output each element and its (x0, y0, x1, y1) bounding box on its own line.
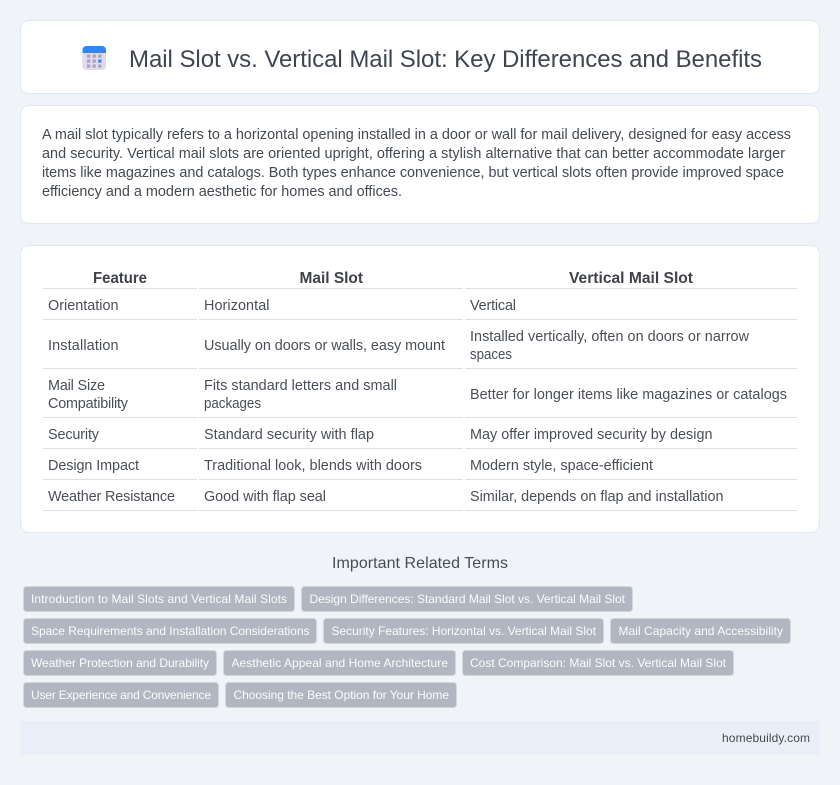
chip (24, 586, 294, 612)
chip (610, 618, 790, 644)
row: orientation: Orientation (48, 298, 118, 314)
chip: Introduction to Mail Slots and Vertical Mail Slots (31, 592, 287, 606)
row: installation: spaces (470, 347, 512, 363)
panel: comparison table (20, 246, 820, 532)
chip: Weather Protection and Durability (31, 656, 209, 670)
row: orientation (43, 298, 797, 320)
row: orientation: Vertical (470, 298, 516, 314)
related term chips (24, 586, 790, 708)
chip (302, 586, 632, 612)
row: installation: Usually on doors or walls, easy mount (204, 338, 445, 354)
row: mail size compatibility: Mail Size (48, 378, 105, 394)
row: security: Standard security with flap (204, 427, 374, 443)
chip (462, 650, 734, 676)
panel: header (20, 20, 820, 94)
text block: description: A mail slot typically refers to a horizontal opening installed in a door or wall for mail delivery, designed for easy access (42, 127, 791, 143)
footer: homebuildy.com (722, 731, 810, 745)
table header: Feature (93, 270, 147, 287)
row: mail size compatibility: packages (204, 396, 261, 412)
row: security: May offer improved security by design (470, 427, 712, 443)
row: security (43, 427, 797, 449)
table header: Mail Slot (300, 270, 364, 287)
chip (24, 618, 316, 644)
chip (24, 650, 216, 676)
chip: Space Requirements and Installation Considerations (31, 624, 310, 638)
row: orientation: Horizontal (204, 298, 270, 314)
chip (24, 682, 218, 708)
row: design impact: Modern style, space-efficient (470, 458, 653, 474)
chip: Choosing the Best Option for Your Home (234, 688, 449, 702)
table header: Vertical Mail Slot (569, 270, 694, 287)
chip: Mail Capacity and Accessibility (618, 624, 783, 638)
chip: Security Features: Horizontal vs. Vertical Mail Slot (332, 624, 597, 638)
text block: description: items like magazines and catalogs. Both types enhance convenience, but vertical slots often provide improved space (42, 165, 784, 181)
row: design impact (43, 458, 797, 480)
chip (224, 650, 456, 676)
row: weather resistance: Similar, depends on flap and installation (470, 489, 724, 505)
row: installation: Installed vertically, often on doors or narrow (470, 329, 750, 345)
row: design impact: Traditional look, blends with doors (204, 458, 422, 474)
row: weather resistance: Weather Resistance (48, 489, 175, 505)
icon: calendar (82, 46, 106, 70)
chip: User Experience and Convenience (31, 688, 211, 702)
row: mail size compatibility: Better for longer items like magazines or catalogs (470, 387, 787, 403)
row: weather resistance (43, 489, 797, 511)
text block: description (42, 127, 791, 200)
footer (20, 721, 820, 755)
row: weather resistance: Good with flap seal (204, 489, 326, 505)
chip (226, 682, 456, 708)
panel: description (20, 106, 820, 224)
chip: Cost Comparison: Mail Slot vs. Vertical Mail Slot (470, 656, 727, 670)
chip: Design Differences: Standard Mail Slot vs. Vertical Mail Slot (310, 592, 626, 606)
chip: Aesthetic Appeal and Home Architecture (232, 656, 448, 670)
row: mail size compatibility (43, 378, 797, 418)
chip (324, 618, 604, 644)
text block: description: efficiency and a modern aesthetic for homes and offices. (42, 184, 402, 200)
title: Mail Slot vs. Vertical Mail Slot: Key Differences and Benefits (129, 46, 762, 73)
row: installation: Installation (48, 338, 118, 354)
row: design impact: Design Impact (48, 458, 139, 474)
text block: description: and security. Vertical mail slots are oriented upright, offering a stylish alternative that can better accommodate larger (42, 146, 785, 162)
heading: important related terms: Important Related Terms (332, 555, 508, 572)
row: security: Security (48, 427, 100, 443)
table header (43, 270, 797, 289)
row: installation (43, 329, 797, 369)
row: mail size compatibility: Compatibility (48, 396, 129, 412)
row: mail size compatibility: Fits standard letters and small (204, 378, 397, 394)
